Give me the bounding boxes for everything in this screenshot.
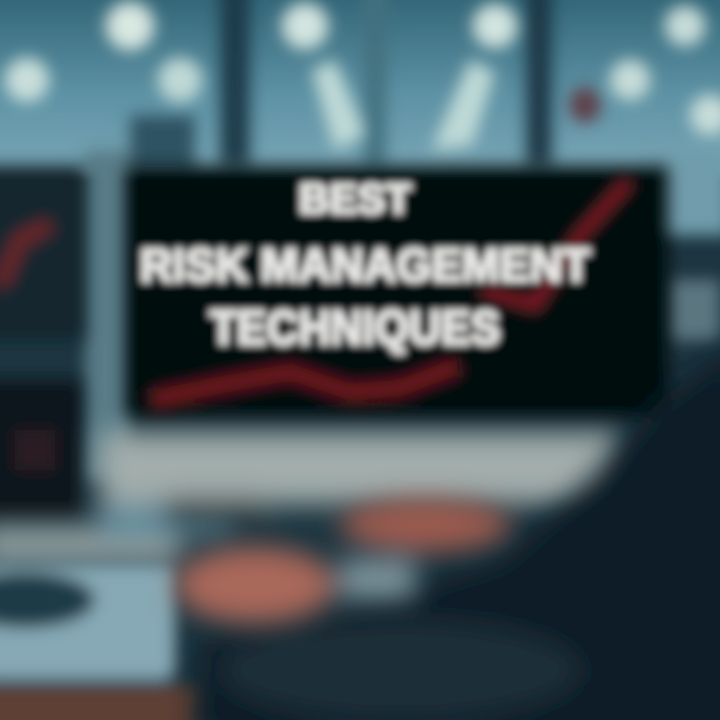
main monitor — [126, 166, 668, 416]
laptop screen — [0, 380, 82, 520]
bottom-left light-blue object — [0, 565, 200, 720]
desk and keyboard — [0, 432, 620, 565]
left monitor with red chart — [0, 165, 85, 340]
dark sleeve and figure — [195, 340, 720, 720]
monitor red chart — [150, 180, 630, 400]
hands — [175, 499, 510, 623]
headline — [140, 175, 590, 355]
headline: TECHNIQUES — [210, 302, 500, 355]
headline: BEST — [299, 175, 411, 222]
headline: RISK MANAGEMENT — [140, 239, 590, 291]
ceiling lights — [5, 2, 720, 150]
